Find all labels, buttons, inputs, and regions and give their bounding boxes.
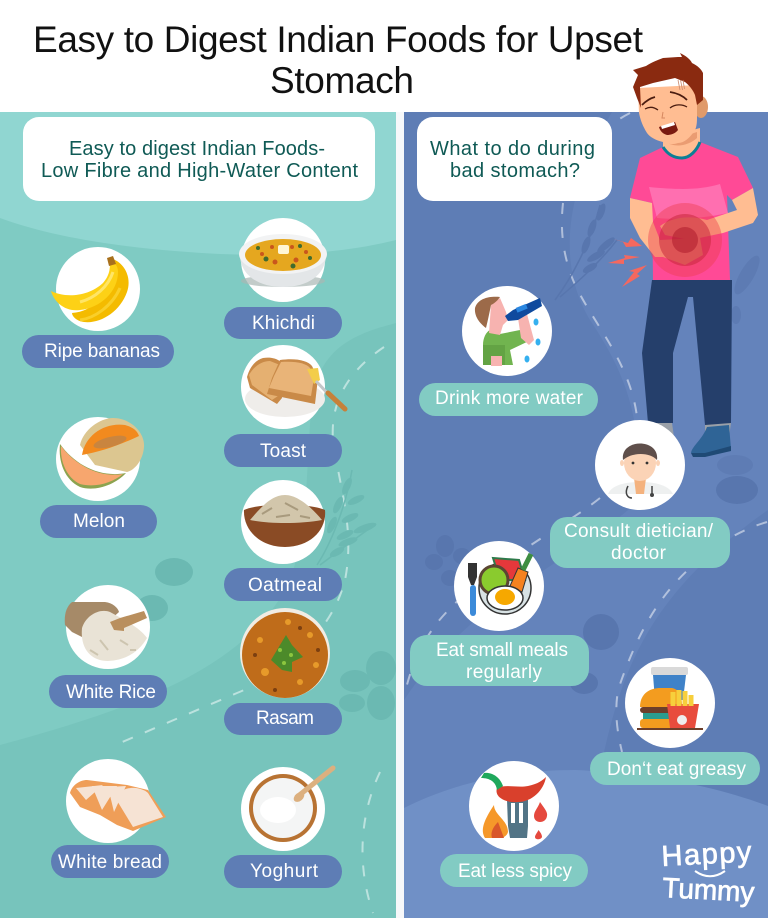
label: melon: Melon <box>73 511 125 532</box>
item: khichdi <box>224 218 342 339</box>
icon: melon <box>60 418 144 489</box>
label: ripe bananas <box>22 335 174 368</box>
title: Easy to Digest Indian Foods for Upset <box>33 19 644 60</box>
label: eat small meals: regularly <box>466 662 542 683</box>
item: toast <box>224 345 345 467</box>
heading: easy to digest foods <box>23 117 375 201</box>
label: yoghurt: Yoghurt <box>250 861 319 882</box>
item: ripe bananas <box>22 247 174 368</box>
panel: easy to digest foods <box>0 112 396 918</box>
label: consult dietician/doctor: doctor <box>611 543 667 564</box>
icon: meal plate with egg <box>468 554 531 616</box>
icon: doctor <box>608 444 673 498</box>
logo: Happy Tummy <box>661 836 755 908</box>
icon: burger and fries <box>637 667 703 730</box>
panel: what to do <box>404 112 768 918</box>
illustration: man holding stomach <box>608 53 758 457</box>
label: khichdi: Khichdi <box>252 313 315 334</box>
label: eat less spicy: Eat less spicy <box>458 861 572 882</box>
label: ripe bananas: Ripe bananas <box>44 341 160 362</box>
label: eat small meals: Eat small meals <box>436 640 568 661</box>
item: drink more water <box>419 286 598 416</box>
item: small meals <box>410 541 589 686</box>
logo: Happy Tummy: Tummy <box>662 872 755 908</box>
label: don't eat greasy: Don‘t eat greasy <box>607 759 746 780</box>
label: eat small meals <box>410 635 589 686</box>
icon: toast and knife <box>245 358 345 417</box>
icon: khichdi bowl <box>239 234 327 287</box>
heading: what to do <box>417 117 612 201</box>
label: eat less spicy <box>440 854 588 887</box>
icon: boy drinking water <box>475 297 542 366</box>
heading: what to do: What to do during <box>430 138 595 160</box>
heading: what to do: bad stomach? <box>450 160 580 182</box>
item: melon <box>40 417 157 538</box>
label: white rice: White Rice <box>66 682 156 703</box>
item: less spicy <box>440 761 588 887</box>
icon: rasam bowl <box>242 612 328 698</box>
icon: rice sack <box>65 602 147 661</box>
item: rasam <box>224 608 342 735</box>
label: don't eat greasy <box>590 752 760 785</box>
item: no greasy food <box>590 658 760 785</box>
label: white bread: White bread <box>58 852 162 873</box>
label: consult dietician/doctor <box>550 517 730 568</box>
label: consult dietician/doctor: Consult dietician/ <box>564 521 714 542</box>
label: drink more water: Drink more water <box>435 388 584 409</box>
icon: oatmeal bowl <box>244 495 325 547</box>
item: white rice <box>49 585 167 708</box>
label: drink more water <box>419 383 598 416</box>
heading: easy to digest foods: Easy to digest Indian Foods- <box>69 138 325 160</box>
icon: sliced bread <box>70 780 166 831</box>
heading: easy to digest foods: Low Fibre and High-Water Content <box>41 160 358 182</box>
icon: bananas <box>51 256 129 322</box>
label: oatmeal: Oatmeal <box>248 575 322 596</box>
icon: yoghurt bowl <box>249 768 333 842</box>
item: white bread <box>51 759 169 878</box>
item: oatmeal <box>224 480 342 601</box>
label: rasam: Rasam <box>256 708 314 729</box>
item: consult doctor <box>550 420 730 568</box>
title <box>33 19 644 101</box>
item: yoghurt <box>224 767 342 888</box>
title: Stomach <box>270 60 414 101</box>
label: toast: Toast <box>260 441 307 462</box>
logo: Happy Tummy: Happy <box>661 836 753 873</box>
icon: chili, fork and flame <box>481 773 547 839</box>
